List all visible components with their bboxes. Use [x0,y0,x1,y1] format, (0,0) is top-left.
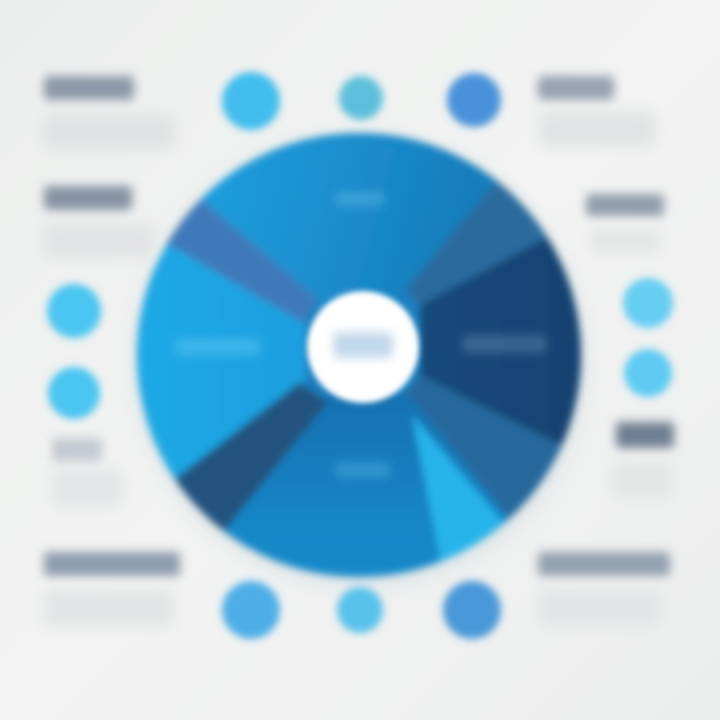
callout: upper left [44,186,154,258]
disc base [280,140,577,566]
icon: left upper [47,284,101,338]
center hub [307,291,419,403]
segment label: left [175,338,260,356]
segment: upper right band [405,181,548,306]
segment label: top [335,192,385,206]
icon: top center [339,76,383,120]
callout: lower right [612,422,674,498]
segment: lower right band [406,376,566,519]
icon: left lower [48,367,100,419]
infographic [36,66,682,645]
callout: lower left [52,438,122,506]
disc shadow [136,138,584,586]
segment label: bottom [335,462,390,478]
icon: bottom left [222,581,280,639]
circular chart [130,126,588,584]
segment: bottom [222,396,509,580]
segment label: right [462,335,547,353]
segment: bright lower right accent [409,415,506,566]
icon: bottom right [443,581,501,639]
segment: top [202,130,496,305]
callout: top left [44,76,174,148]
icon: top left [222,72,280,130]
callout: upper right [586,194,664,254]
segment: left [134,242,308,480]
callout: bottom right [538,552,670,626]
hub label [333,332,393,358]
segment: lower left band [172,380,328,534]
segment: upper left band [164,197,320,324]
segment: right [416,236,586,448]
icon: right upper [623,278,673,328]
callout: top right [538,76,655,146]
icon: top right [447,73,501,127]
icon: right lower [624,349,672,397]
icon: bottom center [337,587,383,633]
callout: bottom left [44,552,180,626]
